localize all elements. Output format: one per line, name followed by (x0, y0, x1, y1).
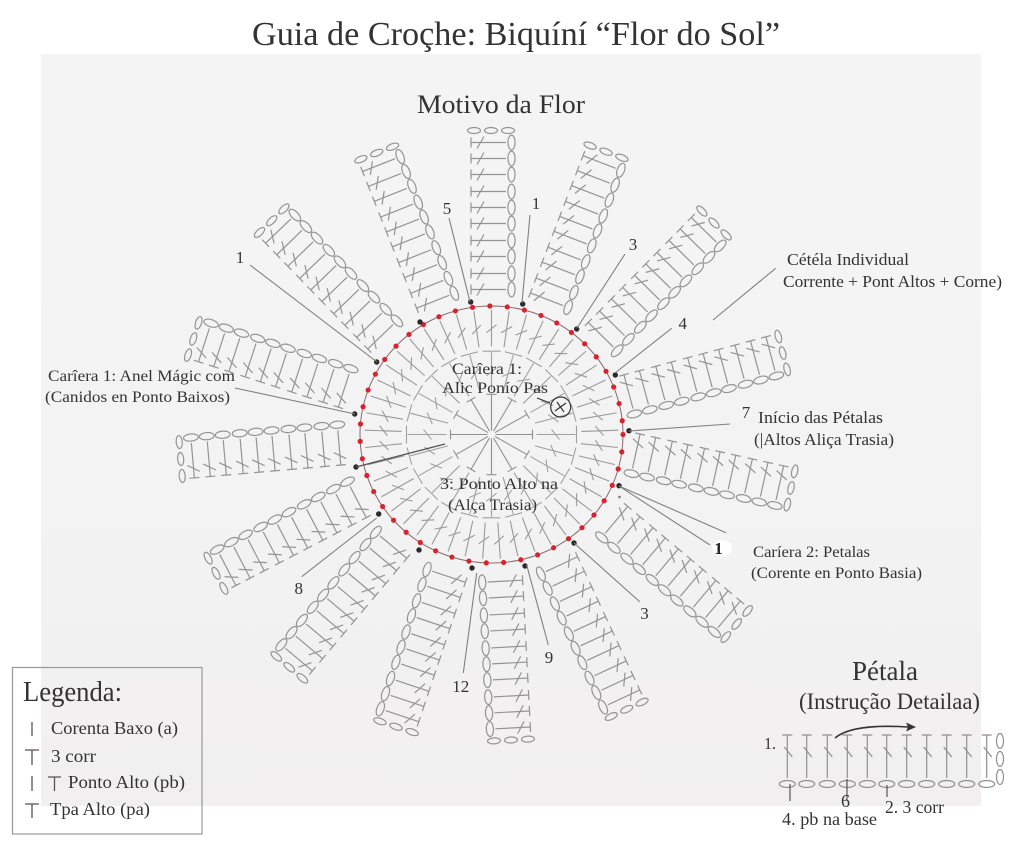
black anchor dots (352, 299, 632, 571)
panel: legend (12, 668, 202, 834)
number labels: 12 (452, 677, 469, 696)
legend items: Ponto Alto (pb) (68, 772, 185, 793)
number labels: 3 (640, 604, 649, 623)
petal subheading: (Instrução Detailaa) (799, 689, 980, 714)
petal labels (764, 734, 944, 829)
centre stitch rings (364, 310, 619, 559)
red ring of dots (360, 306, 623, 563)
number labels: 1 (236, 248, 244, 267)
legend items: 3 corr (51, 746, 96, 766)
number labels: 5 (443, 199, 451, 218)
number labels: 4 (678, 314, 687, 333)
petal labels: 1. (764, 734, 776, 753)
callout: individual petal (783, 250, 1002, 291)
callout: start of petals: Início das Pétalas (758, 408, 883, 427)
number label with white blob (712, 539, 732, 558)
callout: individual petal: Corrente + Pont Altos + Corne) (783, 272, 1002, 291)
center labels: Alic Ponío Pas (442, 380, 548, 397)
callout: individual petal: Cétéla Individual (787, 250, 909, 269)
number label with white blob: 1 (714, 539, 723, 558)
callout: start of petals: (|Altos Aliça Trasia) (754, 430, 894, 449)
title: Guia de Croçhe: Biquíní “Flor do Sol” (252, 16, 780, 53)
heading: flower motif: Motivo da Flor (417, 90, 585, 119)
arrow (835, 722, 916, 738)
center labels: (Alça Trasia) (448, 497, 537, 514)
callout: round 2 (751, 544, 922, 582)
legend items: Corenta Baxo (a) (51, 718, 178, 739)
icon: start marker (537, 397, 571, 417)
petal stitch diagram (779, 734, 1004, 801)
callout: round 1 (45, 368, 236, 406)
center labels: Carîera 1: (452, 361, 522, 378)
center labels (440, 361, 558, 514)
petal labels: 2. 3 corr (885, 797, 944, 817)
number labels: 7 (742, 403, 751, 422)
petal heading: Pétala (852, 656, 918, 686)
legend items: Tpa Alto (pa) (50, 799, 150, 820)
petal labels: 6 (841, 791, 850, 811)
callout: round 2: Caríera 2: Petalas (753, 544, 870, 561)
number labels: 1 (532, 194, 540, 213)
number labels: 3 (629, 235, 637, 254)
chart: flower motif with 16 petals (176, 128, 799, 744)
number labels: 8 (294, 579, 303, 598)
callout: round 2: (Corente en Ponto Basia) (751, 565, 922, 582)
number labels (236, 194, 751, 696)
callout: round 1: (Canidos en Ponto Baixos) (45, 389, 230, 406)
legend icons (25, 722, 61, 818)
callout: start of petals (754, 408, 894, 449)
pointer lines (235, 215, 776, 673)
legend items (50, 718, 185, 820)
petal labels: 4. pb na base (782, 809, 877, 829)
panel: petal detail (764, 656, 1004, 829)
number labels: 9 (545, 648, 553, 667)
petals (176, 128, 799, 744)
callout: round 1: Carîera 1: Anel Mágic com (48, 368, 236, 385)
center labels: 3: Ponto Alto na (440, 476, 558, 493)
legend heading: Legenda: (23, 677, 122, 708)
